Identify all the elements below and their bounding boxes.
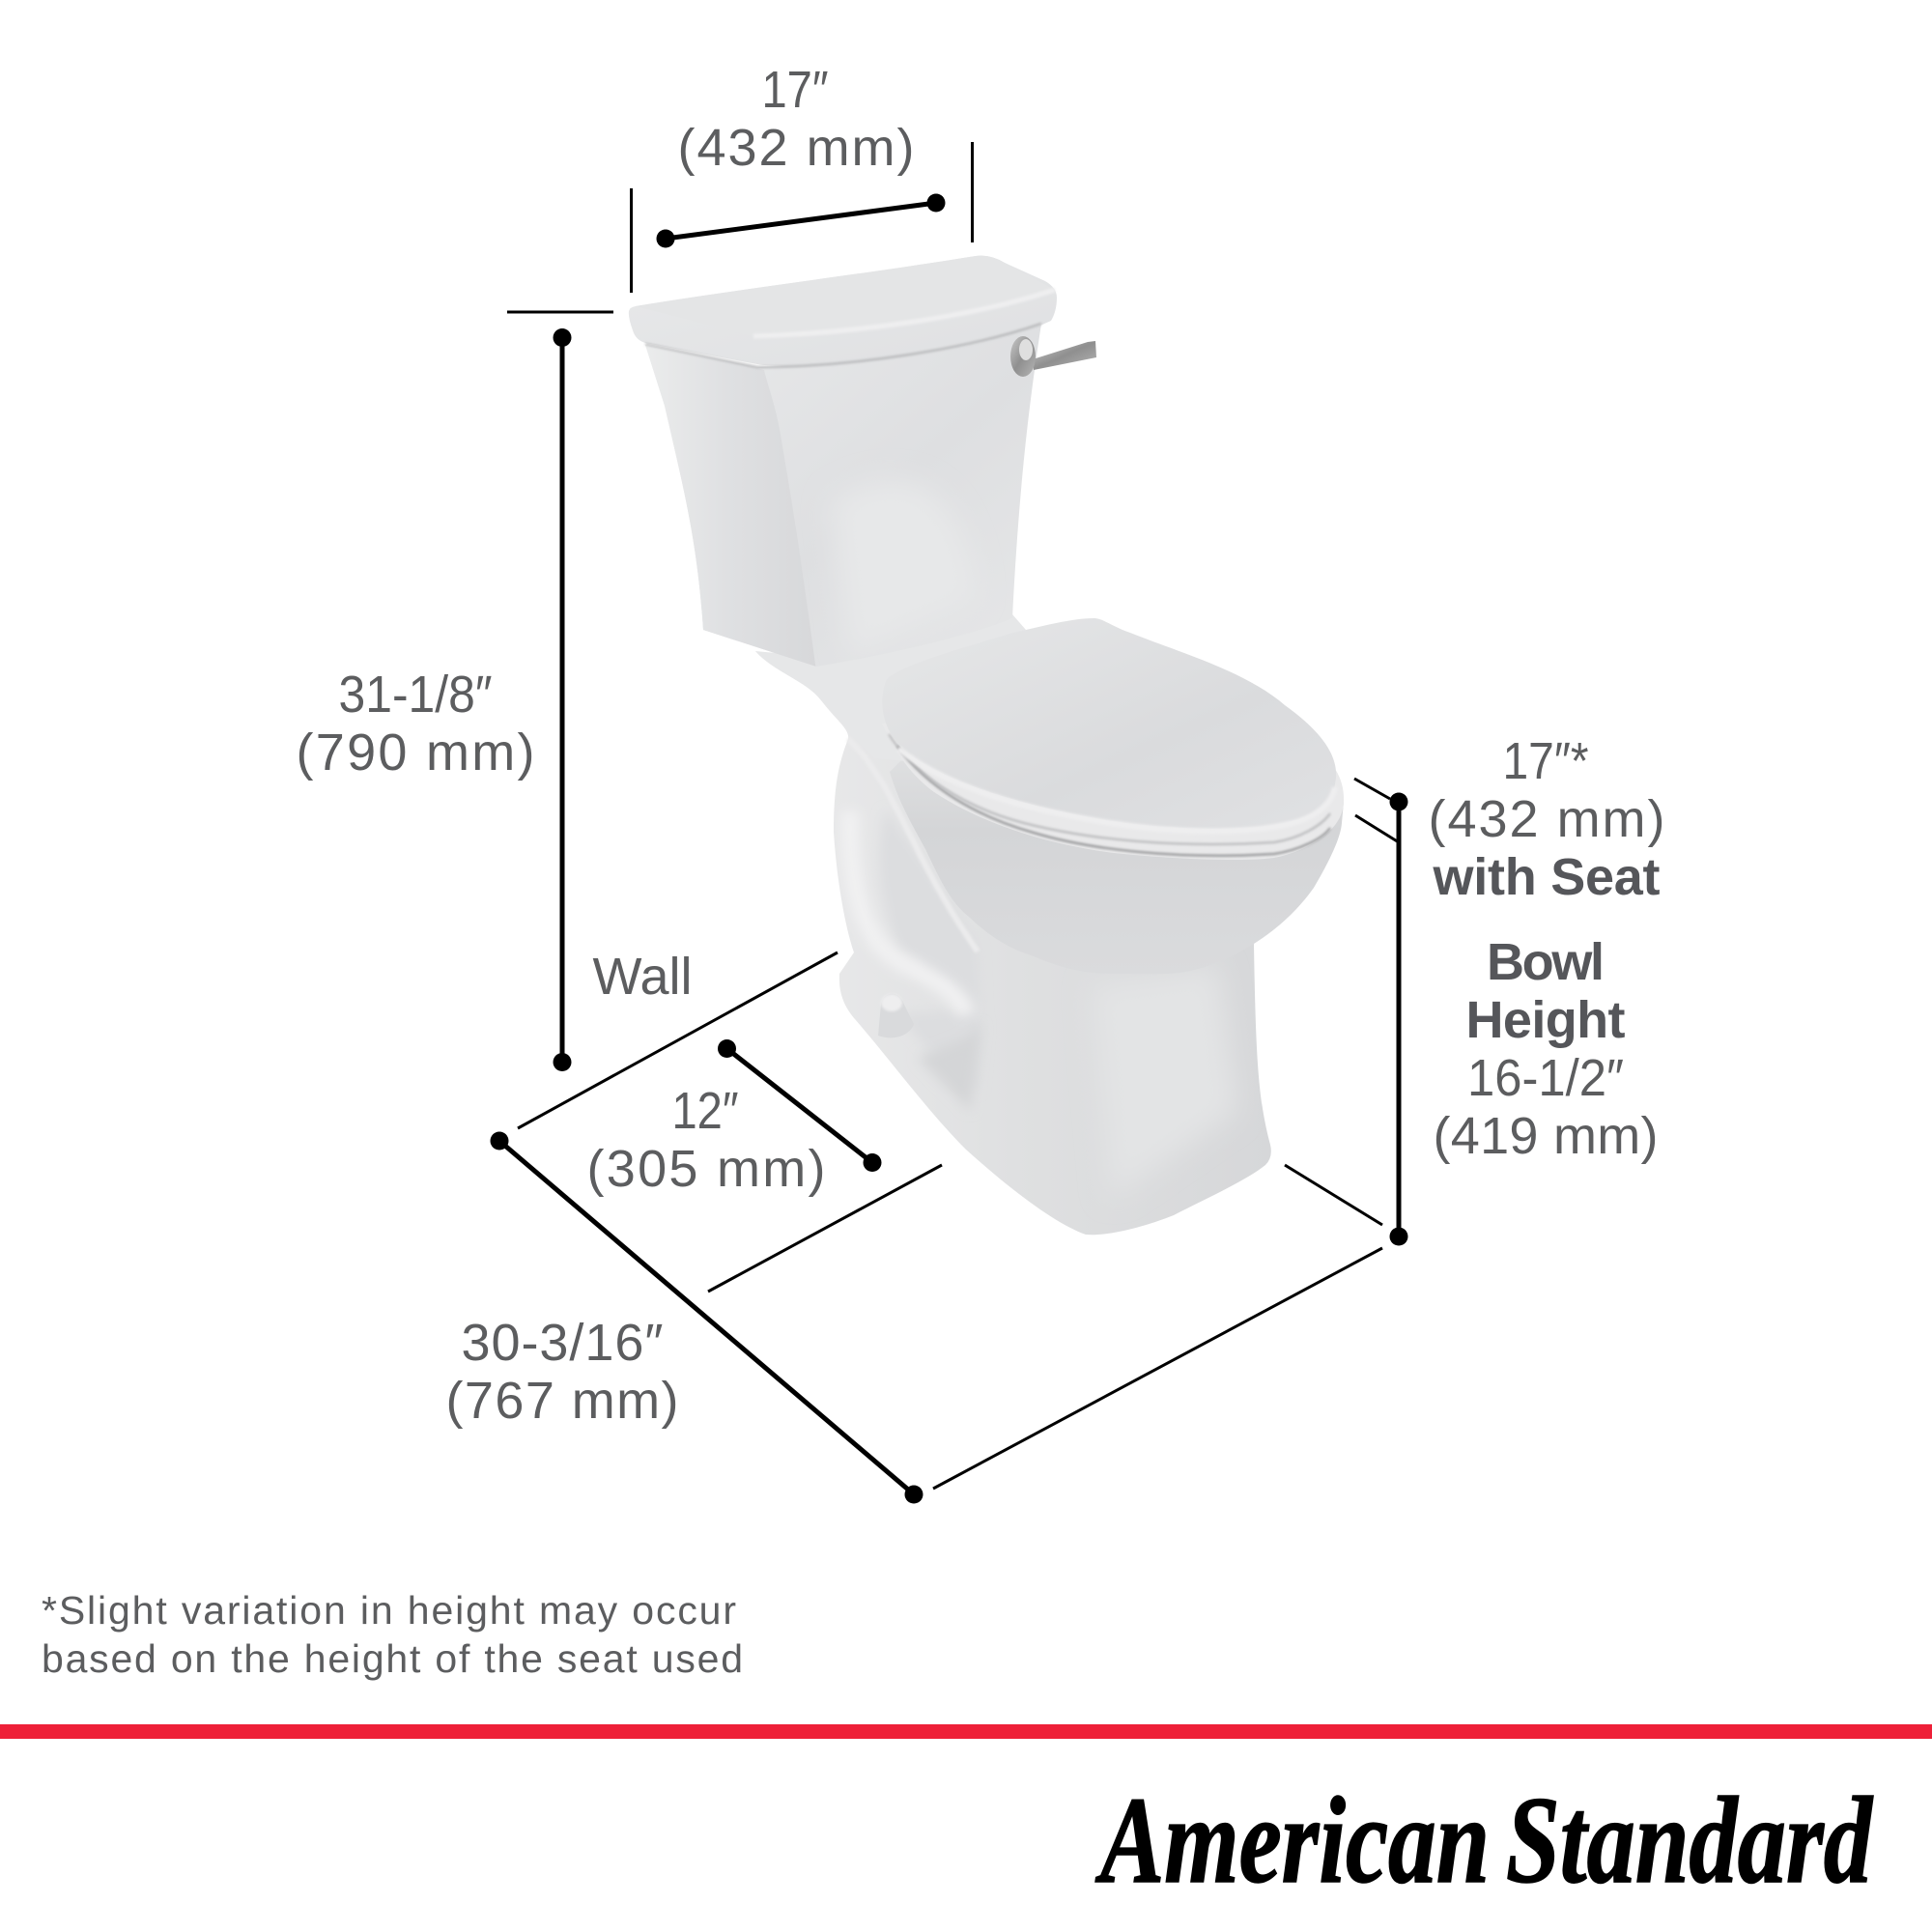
tank body [638, 324, 1041, 671]
tank shelf [755, 614, 1026, 763]
seat ring [882, 715, 1344, 860]
label: bowl height: (432 mm) [1428, 790, 1665, 848]
toilet pedestal base [821, 701, 1271, 1235]
wall reference line [518, 952, 838, 1128]
label: bowl height: Height [1466, 991, 1626, 1049]
label: bowl height: 16-1/2″ [1467, 1049, 1624, 1107]
label: rough-in: (305 mm) [587, 1140, 825, 1198]
label: total height: (790 mm) [296, 724, 535, 781]
dimension: rough-in [708, 1039, 942, 1292]
logo: American Standard [1095, 1772, 1874, 1909]
toilet illustration [629, 256, 1344, 1235]
red divider bar [0, 1724, 1932, 1739]
label: total height [296, 666, 535, 781]
label: total depth: (767 mm) [446, 1372, 678, 1430]
dimension: bowl height [1285, 779, 1408, 1246]
seat lid [882, 618, 1336, 831]
footnote: *Slight variation in height may occur [42, 1588, 736, 1633]
bolt cap [878, 994, 914, 1037]
dimension: total depth [491, 1132, 1382, 1503]
footnote [42, 1588, 743, 1681]
label: tank width: 17″ [761, 61, 829, 119]
label: rough-in [587, 1082, 825, 1198]
logo: American Standard: American [1095, 1772, 1490, 1909]
tank lid [629, 256, 1057, 367]
label: total depth [446, 1314, 678, 1430]
label: bowl height [1428, 732, 1665, 1165]
label: bowl height: with Seat [1432, 848, 1661, 906]
label: tank width: (432 mm) [678, 119, 914, 177]
label: bowl height: (419 mm) [1434, 1107, 1658, 1165]
label: bowl height: 17″* [1503, 732, 1588, 790]
label: total height: 31-1/8″ [338, 666, 493, 724]
dimension: tank width [632, 142, 972, 293]
label: bowl height: Bowl [1487, 933, 1605, 991]
label: total depth: 30-3/16″ [462, 1314, 663, 1372]
label: tank width [678, 61, 914, 177]
dimension: total height [507, 312, 613, 1071]
flush lever [1010, 336, 1096, 377]
bowl [890, 734, 1344, 974]
footnote: based on the height of the seat used [42, 1636, 743, 1681]
label: rough-in: 12″ [672, 1082, 738, 1140]
label: wall: Wall [593, 948, 692, 1006]
bowl neck strip [848, 739, 978, 952]
